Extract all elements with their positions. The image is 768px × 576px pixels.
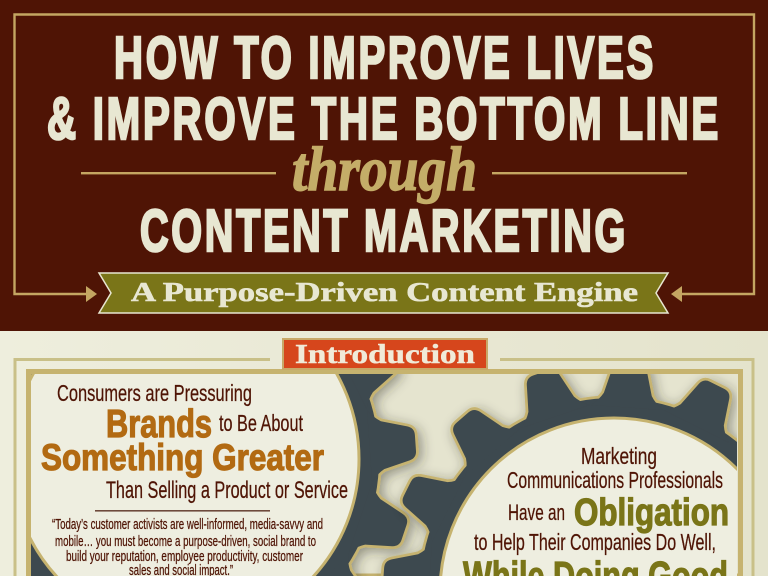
- left quote: mobile… you must become a purpose-driven, social brand to: [55, 534, 316, 550]
- right headline: Have an: [508, 500, 565, 525]
- left headline: Consumers are Pressuring: [57, 380, 252, 406]
- right headline: [463, 443, 729, 576]
- subtitle ribbon: [99, 273, 668, 313]
- right gear: [376, 374, 737, 576]
- left quote: “Today’s customer activists are well-informed, media-savvy and: [52, 517, 323, 533]
- left quote: build your reputation, employee productivity, customer: [66, 549, 303, 565]
- left headline: Than Selling a Product or Service: [106, 477, 348, 504]
- right headline: Obligation: [574, 492, 729, 534]
- left divider: [95, 510, 270, 512]
- header panel: [0, 0, 768, 331]
- left circle: [31, 374, 360, 576]
- right headline: Marketing: [581, 443, 657, 469]
- left headline: Brands: [106, 403, 212, 446]
- left headline: [41, 380, 348, 504]
- right circle: [440, 418, 768, 576]
- left headline: Something Greater: [41, 437, 324, 478]
- left quote: [52, 517, 323, 576]
- subtitle ribbon: A Purpose-Driven Content Engine: [131, 277, 638, 307]
- left headline: to Be About: [219, 410, 303, 436]
- title word: through, with side rules: through: [292, 136, 477, 204]
- introduction section background: [0, 331, 768, 576]
- introduction panel: [26, 369, 743, 576]
- gears and circles: [31, 374, 737, 576]
- section label: Introduction: Introduction: [295, 339, 475, 369]
- left gear: [31, 374, 430, 576]
- section outer frame: [15, 360, 753, 576]
- header frame with arrows: [14, 14, 754, 302]
